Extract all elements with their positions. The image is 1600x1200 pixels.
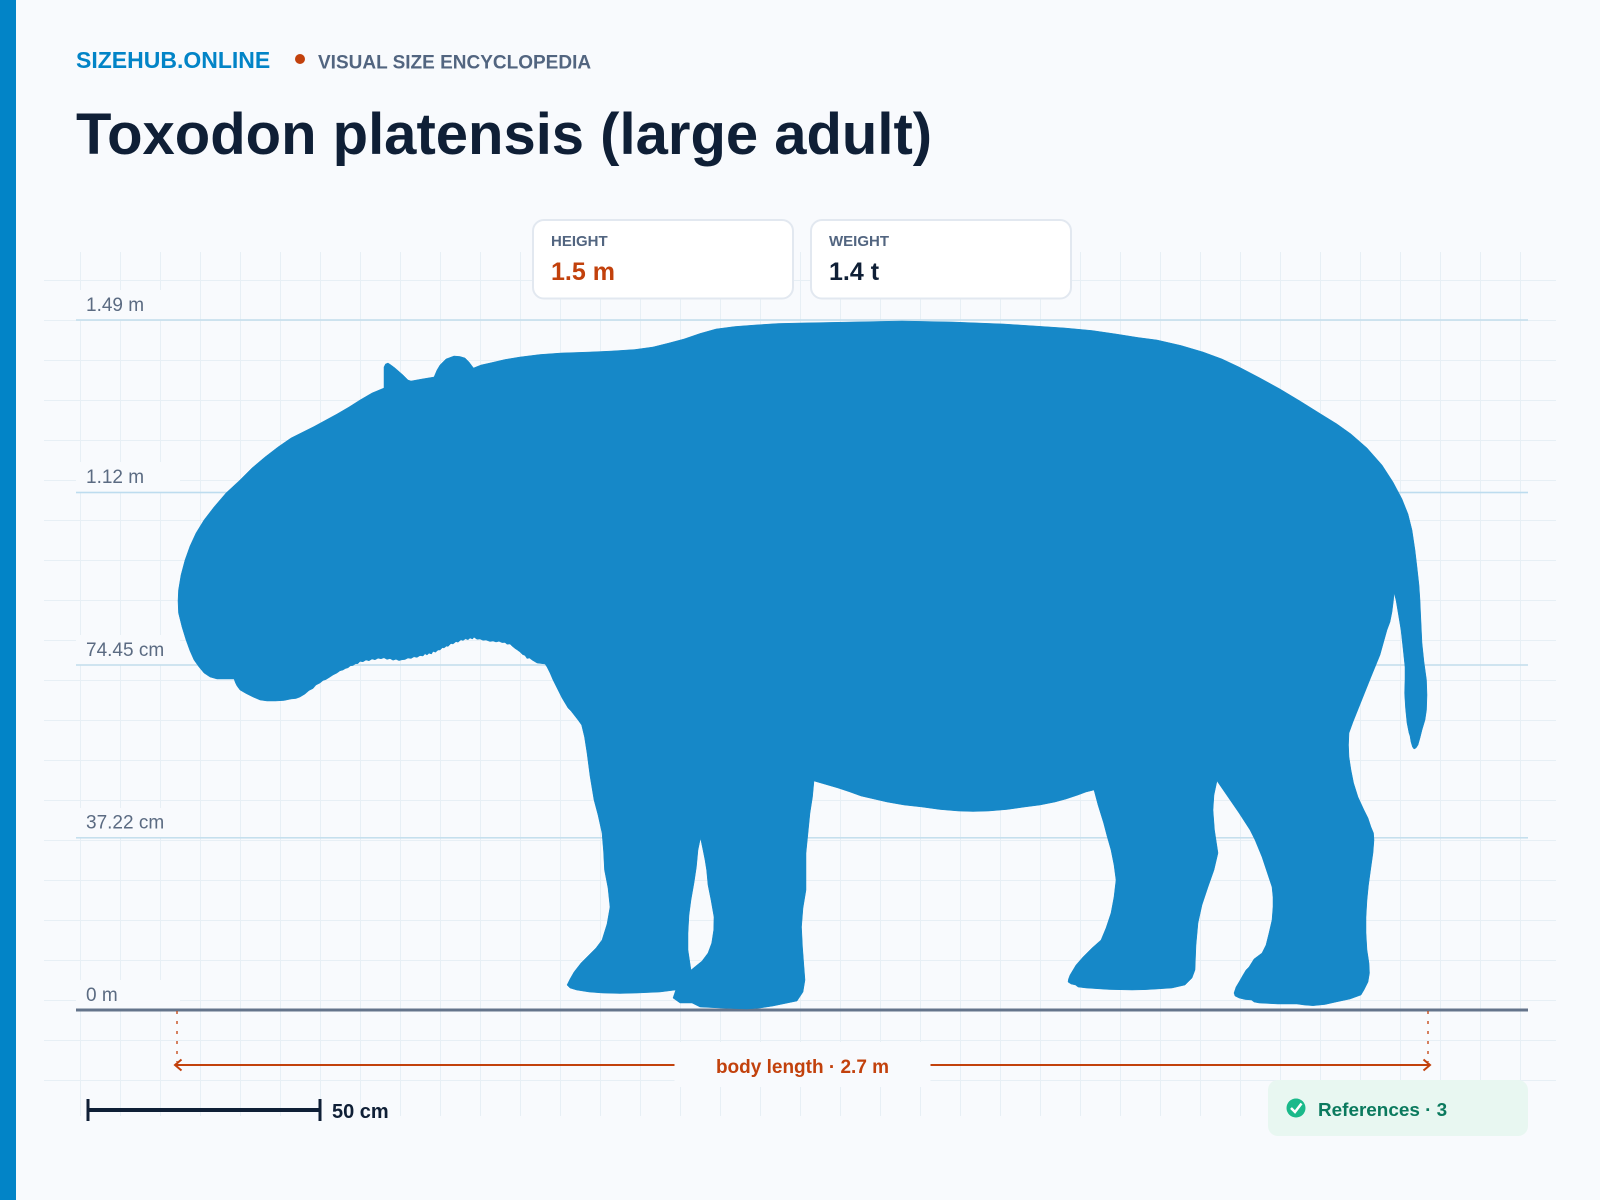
- icon: check: [1286, 1098, 1306, 1118]
- stat card: weight: WEIGHT: [829, 233, 889, 250]
- stat card: height: [533, 220, 793, 298]
- stat card: height: HEIGHT: [551, 233, 608, 250]
- brand header: SIZEHUB.ONLINE: [76, 47, 270, 73]
- baseline: [76, 1008, 1528, 1012]
- brand header: VISUAL SIZE ENCYCLOPEDIA: [318, 52, 591, 74]
- stat card: weight: 1.4 t: [829, 258, 880, 286]
- body length measure: body length · 2.7 m: [716, 1057, 889, 1078]
- height ruler: 74.45 cm: [86, 640, 164, 661]
- height ruler: 0 m: [86, 985, 118, 1006]
- references badge: References · 3: [1318, 1100, 1447, 1121]
- height ruler: 37.22 cm: [86, 812, 164, 834]
- brand header: [76, 47, 591, 74]
- stat card: weight: [811, 220, 1071, 298]
- silhouette: Toxodon: [178, 321, 1427, 1009]
- scale bar: 50 cm: [332, 1101, 389, 1123]
- references badge: [1268, 1080, 1528, 1136]
- title: Toxodon platensis (large adult): [76, 102, 932, 167]
- height ruler: 1.12 m: [86, 467, 144, 488]
- height ruler: [76, 290, 1528, 1010]
- accent bar: [0, 0, 16, 1200]
- height ruler: 1.49 m: [86, 295, 144, 316]
- body length measure: [175, 1011, 1430, 1087]
- stat card: height: 1.5 m: [551, 258, 615, 286]
- scale bar: [86, 1099, 389, 1123]
